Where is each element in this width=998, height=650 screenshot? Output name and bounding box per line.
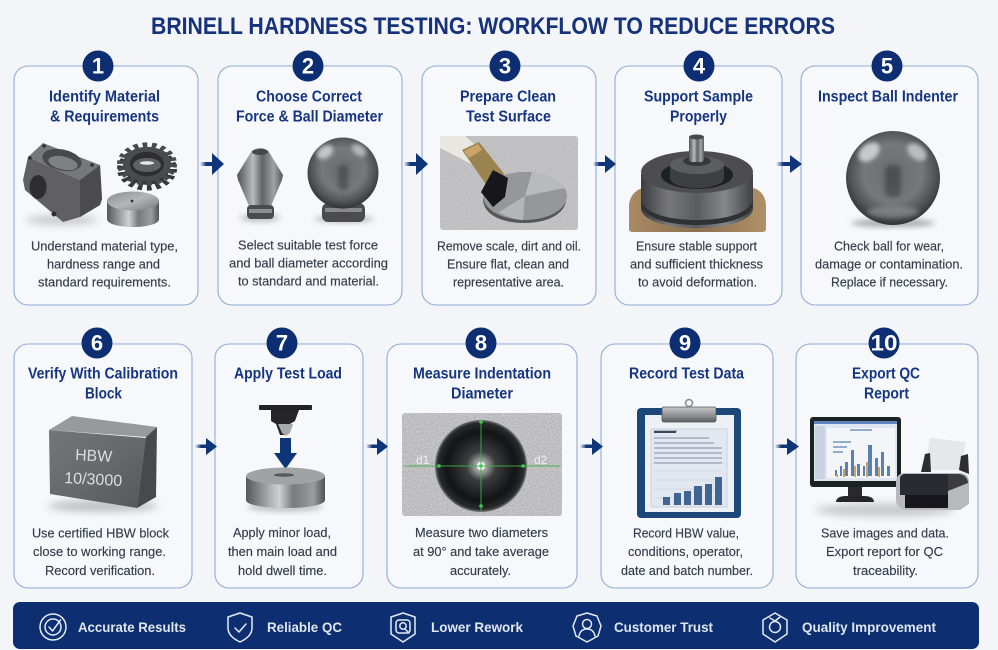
step 7 text: hold dwell time. — [238, 564, 327, 578]
step 7 heading: Apply Test Load — [234, 366, 342, 382]
step 10 heading: Export QC — [852, 366, 920, 382]
panel: step 4 — [615, 50, 782, 305]
panel: step 9 — [601, 328, 773, 588]
step 10 heading — [852, 366, 920, 402]
step 6 heading — [28, 366, 178, 402]
step 3 number: 3 — [499, 54, 511, 78]
step 7 text — [228, 526, 337, 578]
arrow: 1 to 2 — [200, 153, 224, 175]
panel: step 7 — [215, 328, 363, 588]
step 3 heading: Prepare Clean — [460, 88, 556, 106]
step 6 number: 6 — [91, 330, 103, 356]
step 5 text: damage or contamination. — [815, 258, 963, 272]
step 4 heading: Support Sample — [644, 88, 753, 106]
photo: cleaning the surface — [440, 136, 578, 230]
arrow: 2 to 3 — [404, 153, 428, 175]
benefit: customer trust: Customer Trust — [614, 619, 713, 635]
arrow: 6 to 7 — [195, 438, 217, 455]
step 3 text — [437, 240, 581, 290]
step 8 heading: Diameter — [451, 386, 513, 402]
step 10 text: Save images and data. — [821, 526, 949, 540]
icon: support fixture — [629, 134, 766, 232]
step 4 text: to avoid deformation. — [638, 276, 757, 290]
step 9 number: 9 — [679, 330, 691, 356]
step 2 text: and ball diameter according — [229, 256, 388, 270]
step 5 text — [815, 240, 963, 290]
step 2 text: to standard and material. — [238, 274, 379, 288]
icon: clipboard with report — [637, 400, 741, 518]
step 9 text: Record HBW value, — [633, 526, 739, 540]
benefits bar — [13, 602, 979, 649]
step 9 text — [621, 526, 753, 578]
step 7 text: Apply minor load, — [233, 526, 331, 540]
step 2 heading: Choose Correct — [256, 88, 362, 106]
step 2 text: Select suitable test force — [238, 238, 378, 252]
step 4 text: and sufficient thickness — [630, 258, 763, 272]
panel: step 3 — [422, 50, 596, 305]
step 8 text: at 90° and take average — [413, 545, 549, 559]
icon: steel ball — [846, 131, 940, 227]
step 2 number — [292, 50, 324, 82]
panel: step 1 — [14, 50, 198, 305]
step 10 number — [868, 328, 900, 358]
panel: step 8 — [387, 328, 577, 588]
step 10 heading: Report — [864, 386, 909, 402]
step 1 heading: Identify Material — [49, 88, 160, 106]
step 8 text: accurately. — [450, 564, 511, 578]
benefit: lower rework: Lower Rework — [431, 619, 523, 635]
step 1 text: Understand material type, — [31, 240, 178, 254]
step 8 heading: Measure Indentation — [413, 366, 551, 382]
icon: cone indenter and ball — [237, 138, 378, 223]
arrow: 4 to 5 — [776, 155, 802, 173]
step 2 text — [229, 238, 388, 288]
icon: metal parts — [23, 143, 172, 227]
step 8 number — [466, 328, 496, 358]
step 8 text — [413, 526, 549, 578]
step 5 heading: Inspect Ball Indenter — [818, 88, 958, 106]
panel: step 2 — [218, 50, 402, 305]
step 3 text: representative area. — [453, 276, 564, 290]
step 4 text: Ensure stable support — [636, 240, 757, 254]
step 5 text: Replace if necessary. — [831, 276, 948, 290]
step 9 number — [670, 328, 700, 358]
step 10 text: traceability. — [853, 564, 918, 578]
step 6 number — [82, 328, 112, 358]
step 1 text — [31, 240, 178, 290]
arrow: 7 to 8 — [366, 438, 388, 455]
benefit: quality improvement — [763, 613, 936, 642]
step 3 text: Ensure flat, clean and — [447, 258, 569, 272]
step 2 number: 2 — [302, 54, 314, 78]
benefit: accurate results — [40, 614, 186, 640]
icon: calibration block: 10/3000 — [64, 470, 123, 490]
image: indentation micrograph: d1 — [416, 453, 430, 467]
step 6 text: close to working range. — [33, 545, 166, 559]
step 7 number — [266, 328, 298, 358]
step 3 heading: Test Surface — [466, 108, 551, 126]
benefit: reliable QC: Reliable QC — [267, 619, 342, 635]
step 3 heading — [460, 88, 556, 126]
step 6 text: Record verification. — [45, 564, 155, 578]
panel: step 6 — [14, 328, 192, 588]
step 5 text: Check ball for wear, — [834, 240, 944, 254]
step 4 heading — [644, 88, 753, 126]
step 1 heading — [49, 88, 160, 126]
step 4 number — [684, 50, 714, 82]
step 1 number: 1 — [92, 54, 104, 78]
title: BRINELL HARDNESS TESTING: WORKFLOW TO REDUCE ERRORS — [151, 13, 835, 40]
step 1 heading: & Requirements — [50, 108, 159, 126]
gear — [122, 151, 172, 187]
step 10 text — [821, 526, 949, 578]
icon: monitor and printer — [810, 417, 969, 517]
step 5 number: 5 — [881, 54, 893, 78]
step 1 text: standard requirements. — [38, 276, 171, 290]
icon: load application — [246, 405, 325, 512]
step 8 number: 8 — [475, 330, 487, 356]
benefit: quality improvement: Quality Improvement — [802, 619, 936, 635]
step 1 number — [82, 50, 114, 82]
step 9 text: conditions, operator, — [628, 545, 743, 559]
step 4 number: 4 — [693, 54, 706, 78]
step 4 text — [630, 240, 763, 290]
image: indentation micrograph — [402, 413, 562, 516]
benefit: accurate results: Accurate Results — [78, 619, 186, 635]
step 6 heading: Block — [85, 386, 122, 402]
step 3 text: Remove scale, dirt and oil. — [437, 240, 581, 254]
icon: calibration block — [48, 416, 158, 512]
step 1 text: hardness range and — [47, 258, 160, 272]
panel: step 5 — [801, 50, 978, 305]
step 2 heading — [236, 88, 383, 126]
step 10 number: 10 — [870, 330, 898, 356]
step 2 heading: Force & Ball Diameter — [236, 108, 383, 126]
step 7 number: 7 — [276, 330, 288, 356]
arrow: 3 to 4 — [593, 155, 616, 173]
step 8 text: Measure two diameters — [415, 526, 548, 540]
step 8 heading — [413, 366, 551, 402]
step 5 number — [872, 50, 902, 82]
benefit: customer trust — [573, 613, 713, 642]
arrow: 9 to 10 — [775, 438, 799, 455]
step 6 text: Use certified HBW block — [32, 526, 170, 540]
step 10 text: Export report for QC — [826, 545, 943, 559]
disc — [107, 201, 159, 227]
step 7 text: then main load and — [228, 545, 337, 559]
step 4 heading: Properly — [670, 108, 727, 126]
step 9 text: date and batch number. — [621, 564, 753, 578]
step 6 text — [32, 526, 170, 578]
panel: step 10 — [796, 328, 978, 588]
arrow: 8 to 9 — [580, 438, 603, 455]
step 3 number — [490, 50, 520, 82]
step 6 heading: Verify With Calibration — [28, 366, 178, 382]
icon: calibration block: HBW — [75, 447, 114, 466]
benefit: lower rework — [391, 613, 523, 642]
image: indentation micrograph: d2 — [534, 453, 548, 467]
benefit: reliable QC — [228, 613, 342, 642]
step 9 heading: Record Test Data — [629, 366, 744, 382]
